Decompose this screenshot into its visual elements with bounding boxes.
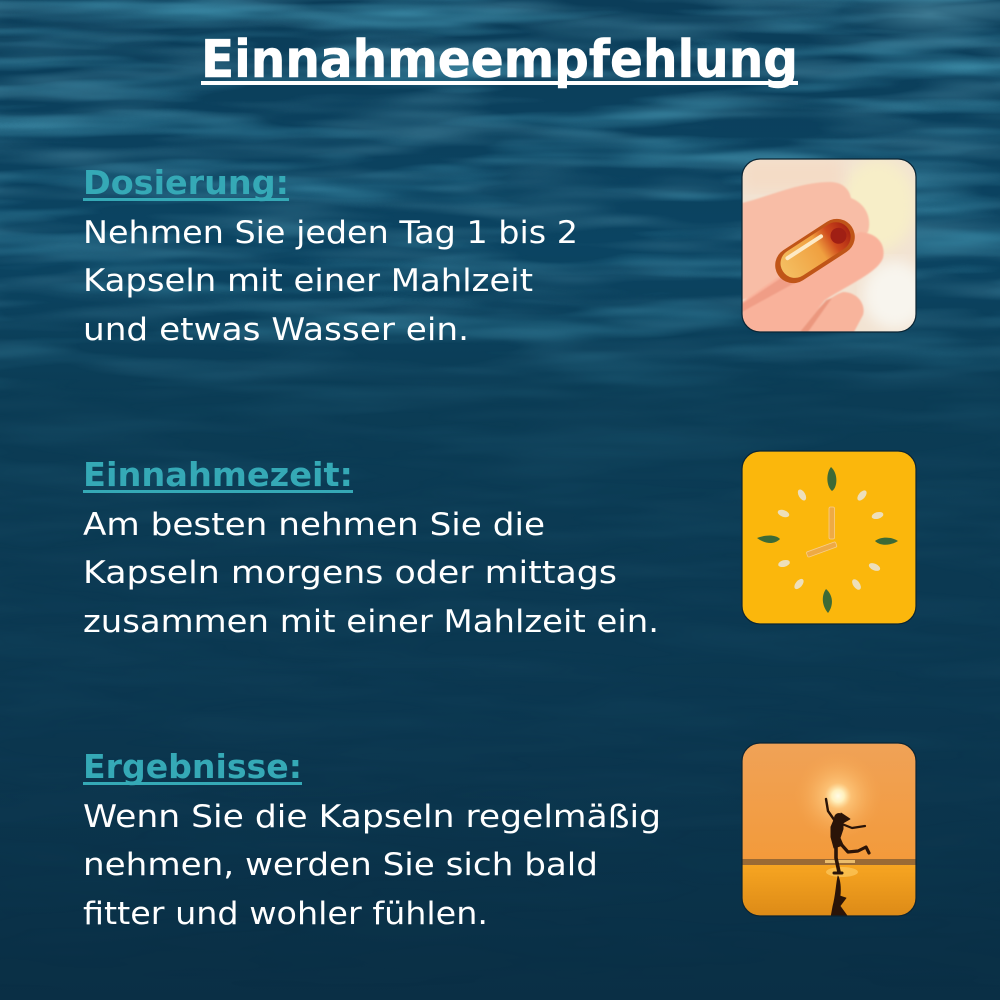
photo: clock of pills and leaves — [742, 451, 916, 624]
text block: Einnahmezeit: Kapseln morgens oder mittags — [83, 555, 617, 591]
section: Ergebnisse — [83, 747, 661, 932]
section: Dosierung — [83, 163, 578, 348]
heading: Ergebnisse: Ergebnisse: — [83, 747, 302, 786]
text block: Einnahmezeit: Am besten nehmen Sie die — [83, 507, 545, 543]
text block: Ergebnisse: fitter und wohler fühlen. — [83, 896, 488, 932]
text block: Einnahmezeit: zusammen mit einer Mahlzeit ein. — [83, 604, 659, 640]
text block: Dosierung — [83, 215, 578, 348]
text block: Ergebnisse: Wenn Sie die Kapseln regelmäßig — [83, 799, 661, 835]
text block: Dosierung: Nehmen Sie jeden Tag 1 bis 2 — [83, 215, 578, 251]
photo border: clock — [742, 451, 916, 624]
photo border: capsule — [742, 159, 916, 332]
photo: capsule held in fingers — [742, 159, 927, 332]
heading: Einnahmezeit: Einnahmezeit: — [83, 455, 353, 494]
photo: woman dancing at sunset — [742, 743, 916, 917]
text block: Einnahmezeit — [83, 507, 659, 640]
text block: Ergebnisse: nehmen, werden Sie sich bald — [83, 847, 598, 883]
section: Einnahmezeit — [83, 455, 659, 640]
text block: Ergebnisse — [83, 799, 661, 932]
silhouette — [826, 799, 869, 917]
clock hands — [806, 507, 837, 557]
text block: Dosierung: und etwas Wasser ein. — [83, 312, 469, 348]
leaves at 12, 3, 6, 9 — [757, 467, 898, 613]
pills — [777, 488, 884, 591]
title: Einnahmeempfehlung — [201, 30, 798, 90]
photo border: sunset — [742, 743, 916, 916]
text block: Dosierung: Kapseln mit einer Mahlzeit — [83, 263, 533, 299]
heading: Dosierung: Dosierung: — [83, 163, 289, 202]
